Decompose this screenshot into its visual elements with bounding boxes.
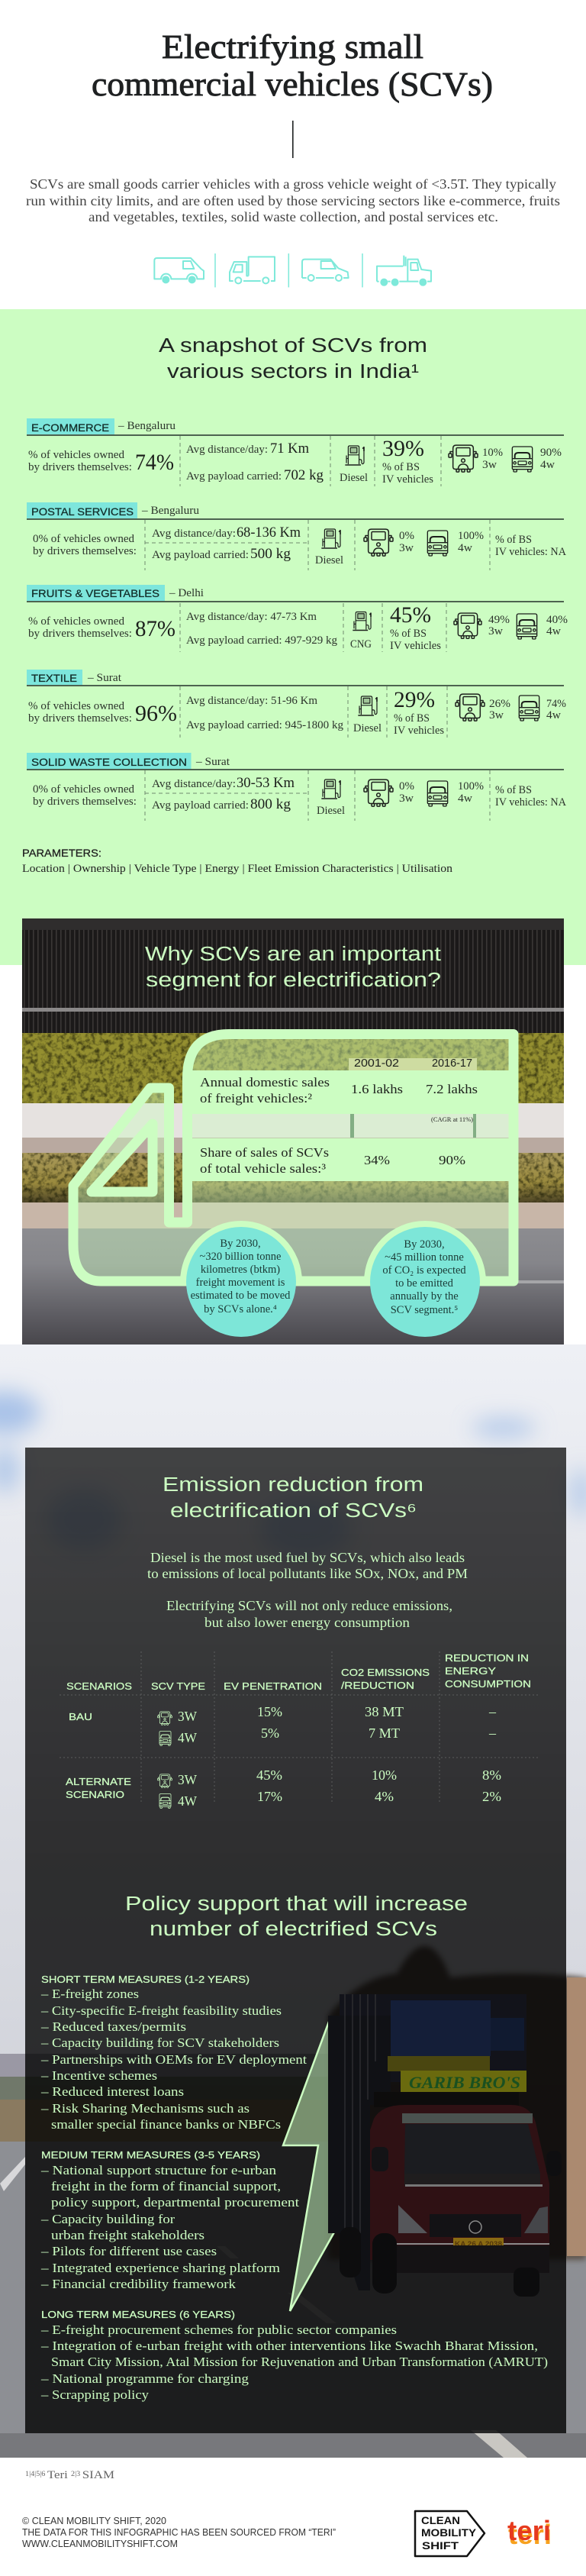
- wheel callout: CO2 emissions: ~45 million tonne: [385, 1251, 464, 1264]
- icon: lightning bolt: [283, 2022, 340, 2311]
- table row: share of sales: [192, 1138, 509, 1181]
- sector: postal services: [27, 502, 567, 570]
- sector: postal services: 4w: [458, 542, 473, 554]
- sector: fruits and vegetables: CNG: [350, 638, 372, 650]
- long term measures: [40, 2309, 548, 2402]
- long term measures: – E-freight procurement schemes for public sector companies: [40, 2323, 397, 2337]
- short term measures: SHORT TERM MEASURES (1-2 YEARS): [41, 1974, 250, 1985]
- sector: solid waste collection: by drivers themselves:: [33, 796, 137, 808]
- short term measures: – Reduced taxes/permits: [40, 2019, 186, 2034]
- table headers: REDUCTION IN: [445, 1652, 529, 1664]
- heading: why SCVs: Why SCVs are an important: [145, 944, 441, 965]
- row: alternate scenario: 4W: [178, 1793, 197, 1809]
- row: BAU: 3W: [178, 1709, 197, 1724]
- wheel callout: freight movement: by SCVs alone.⁴: [204, 1303, 277, 1315]
- emissions intro text: to emissions of local pollutants like SOx, NOx, and PM: [147, 1566, 468, 1581]
- sector: e-commerce: 10%: [482, 447, 503, 459]
- sector: textile: TEXTILE: [31, 672, 77, 684]
- table row: share of sales: 90%: [439, 1153, 465, 1167]
- sector: fruits and vegetables: 3w: [488, 625, 504, 638]
- sector: textile: 74%: [546, 698, 566, 710]
- row: alternate scenario: 2%: [482, 1789, 501, 1804]
- sector: textile: 4w: [546, 709, 562, 721]
- table row: share of sales: 34%: [364, 1153, 390, 1167]
- title: Electrifying small: [162, 28, 423, 66]
- sector: e-commerce: Diesel: [340, 472, 368, 484]
- medium term measures: – Capacity building for: [40, 2212, 175, 2226]
- heading: why SCVs: [145, 944, 441, 991]
- sector: e-commerce: 4w: [540, 459, 555, 471]
- sector: textile: 29%: [394, 687, 435, 712]
- sector: fruits and vegetables: 87%: [135, 616, 175, 641]
- sector: solid waste collection: % of BS: [495, 784, 532, 796]
- sector: postal services: 0%: [399, 530, 414, 542]
- icon row: vehicle types: [154, 253, 431, 287]
- sector: textile: Avg distance/day: 51-96 Km: [186, 695, 318, 707]
- medium term measures: – Pilots for different use cases: [40, 2244, 217, 2258]
- sector: fruits and vegetables: 49%: [488, 614, 510, 626]
- sector: e-commerce: Avg distance/day:: [186, 444, 268, 456]
- photo backdrop: sky and road: [0, 1344, 586, 2458]
- footer credits: [22, 2516, 336, 2549]
- table row: annual sales: [192, 1070, 509, 1114]
- sector: e-commerce: % of vehicles owned: [28, 449, 125, 461]
- title: [92, 28, 493, 103]
- sector: fruits and vegetables: by drivers themselves:: [28, 628, 132, 640]
- emissions table: [60, 1651, 538, 1809]
- sector: fruits and vegetables: 4w: [546, 625, 562, 638]
- sector: fruits and vegetables: – Delhi: [169, 587, 204, 599]
- sector: fruits and vegetables: Avg payload carried: 497-929 kg: [186, 634, 337, 647]
- wheel callout: freight movement: freight movement is: [196, 1277, 285, 1289]
- wheel callout: CO2 emissions: of CO₂ is expected: [382, 1264, 466, 1277]
- sector: postal services: 0% of vehicles owned: [33, 533, 135, 545]
- sector: fruits and vegetables: [27, 585, 568, 652]
- logo: teri: teri: [507, 2515, 551, 2546]
- short term measures: – E-freight zones: [40, 1987, 139, 2001]
- sector: solid waste collection: 4w: [458, 792, 473, 805]
- sector: postal services: % of BS: [495, 534, 532, 546]
- photo: loaded truck: GARIB BRO'S: [409, 2073, 520, 2092]
- sector: postal services: Avg distance/day:: [152, 528, 236, 540]
- medium term measures: [40, 2149, 299, 2291]
- long term measures: – Scrapping policy: [40, 2387, 150, 2402]
- sector: solid waste collection: Avg payload carried:: [152, 799, 249, 812]
- sector: solid waste collection: [27, 753, 567, 821]
- wheel callout: CO2 emissions: By 2030,: [404, 1238, 445, 1251]
- sector: textile: 26%: [489, 698, 510, 710]
- sector: postal services: 100%: [458, 530, 484, 542]
- sector: fruits and vegetables: % of BS: [390, 628, 427, 640]
- sector: solid waste collection: 3w: [399, 792, 414, 805]
- photo: roadside background: [22, 918, 564, 1403]
- row: alternate scenario: ALTERNATE: [66, 1776, 131, 1787]
- sector: e-commerce: IV vehicles: [382, 473, 433, 486]
- sector: solid waste collection: 0%: [399, 780, 414, 792]
- intro text: run within city limits, and are often used by those servicing sectors like e-commerce, fruits: [26, 193, 560, 208]
- sector: textile: 96%: [135, 701, 177, 726]
- heading: snapshot: [159, 335, 427, 383]
- sector: postal services: by drivers themselves:: [33, 545, 137, 557]
- parameters: PARAMETERS:: [22, 847, 101, 859]
- wheel callout: CO2 emissions: annually by the: [390, 1290, 459, 1303]
- sector: solid waste collection: SOLID WASTE COLLECTION: [31, 756, 187, 768]
- sector: textile: IV vehicles: [394, 725, 444, 737]
- title divider: [292, 121, 294, 158]
- short term measures: – Risk Sharing Mechanisms such as: [40, 2101, 250, 2116]
- row: BAU: –: [488, 1725, 497, 1741]
- parameters: Location | Ownership | Vehicle Type | Energy | Fleet Emission Characteristics | Utilisation: [22, 863, 453, 875]
- sector: postal services: 500 kg: [250, 546, 291, 562]
- sector: solid waste collection: IV vehicles: NA: [495, 796, 567, 809]
- table headers: ENERGY: [445, 1665, 496, 1677]
- wheel callout: freight movement: estimated to be moved: [191, 1290, 291, 1302]
- emissions intro text: but also lower energy consumption: [204, 1615, 410, 1630]
- row: BAU: –: [488, 1704, 497, 1719]
- logo: teri: teri: [508, 2519, 552, 2550]
- table headers: EV PENETRATION: [224, 1680, 322, 1692]
- short term measures: [40, 1974, 307, 2132]
- logo: Clean Mobility Shift: CLEAN: [421, 2514, 460, 2526]
- sector: e-commerce: 39%: [382, 436, 424, 461]
- table headers: [66, 1652, 531, 1692]
- sources: SIAM: [82, 2469, 114, 2481]
- title: commercial vehicles (SCVs): [92, 66, 493, 103]
- row: alternate scenario: 3W: [178, 1772, 197, 1787]
- long term measures: – National programme for charging: [40, 2371, 249, 2386]
- long term measures: Smart City Mission, Atal Mission for Rejuvenation and Urban Transformation (AMRUT): [51, 2355, 548, 2369]
- row: alternate scenario: 17%: [257, 1789, 282, 1804]
- wheel callout: CO2 emissions: SCV segment.⁵: [391, 1304, 458, 1316]
- medium term measures: MEDIUM TERM MEASURES (3-5 YEARS): [41, 2149, 260, 2161]
- wheel callout: CO2 emissions: [364, 1221, 486, 1343]
- sector: solid waste collection: 100%: [458, 780, 484, 792]
- sector: solid waste collection: 800 kg: [250, 796, 291, 812]
- sector: e-commerce: – Bengaluru: [118, 420, 175, 432]
- heading: emission reduction: [163, 1474, 423, 1522]
- sector: solid waste collection: Diesel: [317, 805, 345, 817]
- sector: textile: % of BS: [394, 712, 430, 725]
- wheel callout: freight movement: By 2030,: [220, 1238, 261, 1250]
- row: BAU: 4W: [178, 1730, 197, 1745]
- row: alternate scenario: 8%: [482, 1767, 501, 1783]
- medium term measures: policy support, departmental procurement: [51, 2195, 299, 2210]
- logo: Clean Mobility Shift: MOBILITY: [421, 2526, 477, 2539]
- emissions intro text: Diesel is the most used fuel by SCVs, which also leads: [150, 1550, 465, 1565]
- row: alternate scenario: 10%: [372, 1767, 397, 1783]
- CAGR note: (CAGR at 11%): [431, 1116, 473, 1123]
- parameters: [22, 847, 453, 875]
- table row: share of sales: of total vehicle sales:³: [200, 1161, 326, 1176]
- short term measures: – Capacity building for SCV stakeholders: [40, 2035, 279, 2050]
- sector: solid waste collection: – Surat: [195, 756, 230, 768]
- heading: snapshot: various sectors in India¹: [167, 361, 419, 383]
- long term measures: LONG TERM MEASURES (6 YEARS): [41, 2309, 235, 2320]
- table header years: [354, 1057, 472, 1070]
- emissions intro text: Electrifying SCVs will not only reduce emissions,: [166, 1598, 452, 1613]
- footer credits: THE DATA FOR THIS INFOGRAPHIC HAS BEEN SOURCED FROM “TERI”: [22, 2527, 336, 2538]
- logo: Clean Mobility Shift: [415, 2511, 485, 2556]
- table header years: 2001-02: [354, 1057, 399, 1070]
- sector: textile: by drivers themselves:: [28, 712, 132, 725]
- heading: why SCVs: segment for electrification?: [146, 970, 441, 991]
- sector: textile: [27, 670, 566, 738]
- sector: solid waste collection: 30-53 Km: [237, 775, 295, 791]
- panel: why SCVs are important: [22, 918, 564, 1344]
- sector: postal services: IV vehicles: NA: [495, 546, 567, 558]
- sources: 2|3: [71, 2470, 82, 2478]
- row: BAU: 15%: [257, 1704, 282, 1719]
- demand statement: and is largely dependent on the small goods carriers: [140, 1368, 446, 1383]
- row: BAU: [69, 1704, 497, 1745]
- sector: fruits and vegetables: 40%: [546, 614, 568, 626]
- intro text: and vegetables, textiles, solid waste collection, and postal services etc.: [89, 209, 498, 224]
- sector: e-commerce: % of BS: [382, 461, 420, 473]
- sector: textile: Diesel: [353, 722, 382, 734]
- heading: policy support: [125, 1893, 468, 1940]
- heading: policy support: number of electrified SCVs: [150, 1919, 437, 1940]
- sector: textile: % of vehicles owned: [28, 700, 125, 712]
- truck outline: [73, 1034, 514, 1281]
- sector: solid waste collection: Avg distance/day:: [152, 778, 236, 790]
- sector: e-commerce: [27, 418, 564, 486]
- sector: e-commerce: 702 kg: [284, 467, 324, 483]
- sector: e-commerce: 71 Km: [270, 441, 309, 457]
- intro text: [26, 176, 560, 224]
- demand statement: Demand for short-run freight services is increasing by the day,: [111, 1351, 475, 1367]
- logo: Clean Mobility Shift: SHIFT: [422, 2539, 459, 2552]
- sector: postal services: Diesel: [315, 554, 343, 567]
- row: alternate scenario: [66, 1767, 501, 1809]
- sector: postal services: 3w: [399, 542, 414, 554]
- table header years: 2016-17: [432, 1057, 472, 1070]
- photo: loaded truck: [328, 1994, 562, 2297]
- short term measures: smaller special finance banks or NBFCs: [51, 2117, 281, 2132]
- row: BAU: 7 MT: [369, 1725, 400, 1741]
- long term measures: – Integration of e-urban freight with other interventions like Swachh Bharat Mission,: [40, 2339, 538, 2353]
- sector: fruits and vegetables: FRUITS & VEGETABLES: [31, 587, 159, 599]
- sector: e-commerce: 74%: [135, 450, 174, 475]
- sector: postal services: 68-136 Km: [237, 525, 301, 541]
- heading: emission reduction: electrification of SCVs⁶: [170, 1500, 417, 1522]
- intro text: SCVs are small goods carrier vehicles with a gross vehicle weight of <3.5T. They typically: [30, 176, 556, 192]
- sources: 1|4|5|6: [25, 2470, 47, 2478]
- row: BAU: 5%: [261, 1725, 279, 1741]
- short term measures: – Partnerships with OEMs for EV deployment: [40, 2052, 307, 2067]
- medium term measures: freight in the form of financial support,: [51, 2179, 281, 2193]
- medium term measures: – Integrated experience sharing platform: [40, 2261, 280, 2275]
- table row: annual sales: 7.2 lakhs: [426, 1082, 478, 1096]
- medium term measures: – National support structure for e-urban: [40, 2163, 276, 2177]
- emissions intro text: [147, 1550, 468, 1630]
- sector: textile: Avg payload carried: 945-1800 kg: [186, 719, 343, 731]
- table row: annual sales: of freight vehicles:²: [200, 1091, 312, 1106]
- wheel callout: CO2 emissions: to be emitted: [395, 1277, 454, 1290]
- sector: fruits and vegetables: IV vehicles: [390, 640, 441, 652]
- row: alternate scenario: SCENARIO: [66, 1789, 124, 1800]
- panel: dark emissions and policy: [25, 1448, 566, 2433]
- row: alternate scenario: 45%: [256, 1767, 282, 1783]
- sector: fruits and vegetables: % of vehicles owned: [28, 615, 125, 628]
- row: alternate scenario: 4%: [375, 1789, 394, 1804]
- table headers: /REDUCTION: [341, 1680, 414, 1691]
- footer credits: WWW.CLEANMOBILITYSHIFT.COM: [22, 2539, 178, 2549]
- wheel callout: freight movement: [180, 1221, 302, 1343]
- sector: postal services: – Bengaluru: [141, 505, 199, 517]
- table headers: CO2 EMISSIONS: [341, 1667, 430, 1678]
- panel: sector snapshot: [0, 309, 586, 965]
- heading: emission reduction: Emission reduction from: [163, 1474, 423, 1496]
- short term measures: – City-specific E-freight feasibility studies: [40, 2003, 282, 2018]
- sector: solid waste collection: 0% of vehicles owned: [33, 783, 135, 796]
- medium term measures: urban freight stakeholders: [51, 2228, 204, 2242]
- table headers: CONSUMPTION: [445, 1678, 531, 1690]
- sector: fruits and vegetables: Avg distance/day: 47-73 Km: [186, 611, 317, 623]
- row: BAU: BAU: [69, 1711, 92, 1722]
- photo: loaded truck: KA 26 A 2038: [455, 2240, 502, 2248]
- sector: fruits and vegetables: 45%: [390, 602, 431, 628]
- row: BAU: 38 MT: [365, 1704, 404, 1719]
- short term measures: – Reduced interest loans: [40, 2084, 184, 2099]
- sector: e-commerce: Avg payload carried:: [186, 470, 282, 483]
- demand statement: [111, 1351, 475, 1383]
- footer credits: © CLEAN MOBILITY SHIFT, 2020: [22, 2516, 166, 2526]
- medium term measures: – Financial credibility framework: [40, 2277, 237, 2291]
- table headers: SCENARIOS: [66, 1680, 132, 1692]
- heading: policy support: Policy support that will increase: [125, 1893, 468, 1915]
- sector: e-commerce: 90%: [540, 447, 562, 459]
- wheel callout: freight movement: kilometres (btkm): [201, 1264, 280, 1276]
- sector: postal services: POSTAL SERVICES: [31, 505, 134, 518]
- sector: e-commerce: E-COMMERCE: [31, 421, 109, 434]
- sector: e-commerce: 3w: [482, 459, 497, 471]
- table row: annual sales: 1.6 lakhs: [351, 1082, 403, 1096]
- table headers: SCV TYPE: [151, 1680, 205, 1692]
- heading: snapshot: A snapshot of SCVs from: [159, 335, 427, 357]
- sector: textile: 3w: [489, 709, 504, 721]
- sector: postal services: Avg payload carried:: [152, 549, 249, 561]
- wheel callout: freight movement: ~320 billion tonne: [200, 1251, 281, 1263]
- table row: share of sales: Share of sales of SCVs: [200, 1145, 329, 1160]
- sector: e-commerce: by drivers themselves:: [28, 461, 132, 473]
- sources: Teri: [47, 2469, 71, 2481]
- table row: annual sales: Annual domestic sales: [200, 1075, 330, 1089]
- short term measures: – Incentive schemes: [40, 2068, 157, 2083]
- sector: textile: – Surat: [87, 672, 121, 684]
